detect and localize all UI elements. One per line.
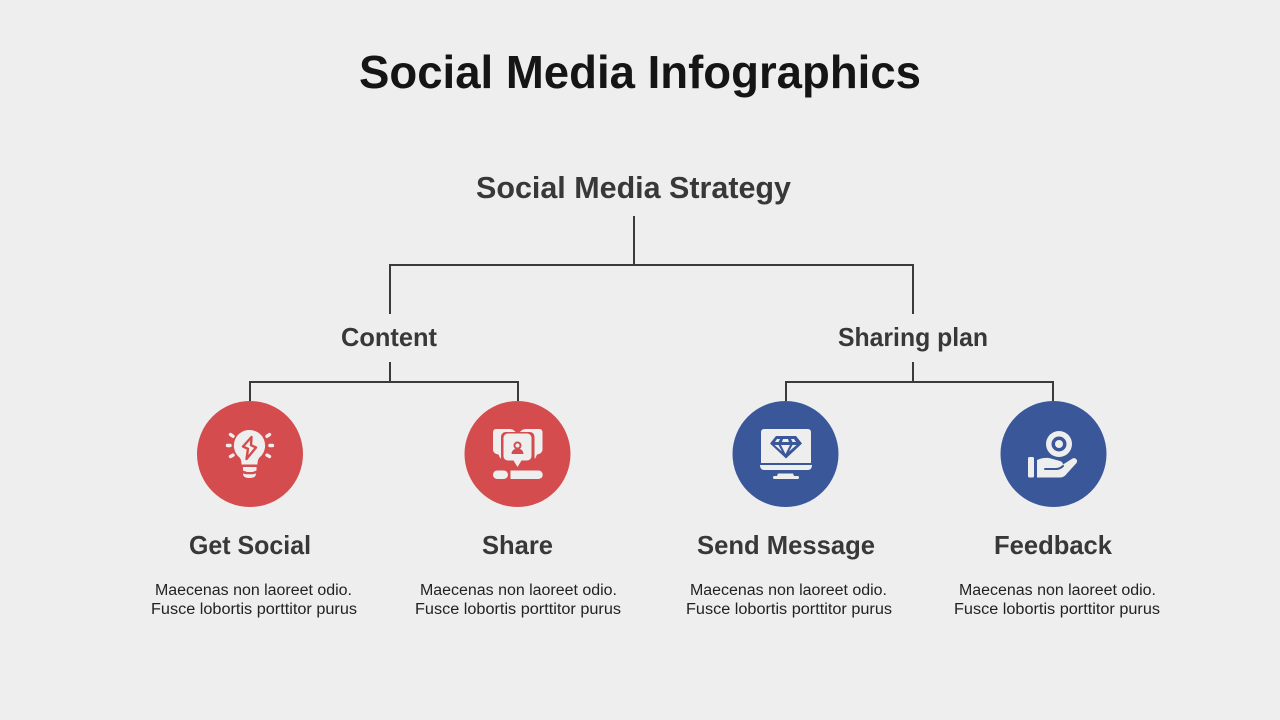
- icon: hand holding coin: [1000, 401, 1106, 507]
- label: Share: [482, 530, 553, 560]
- heading: content: Content: [341, 322, 437, 352]
- item: send message: [686, 401, 892, 618]
- heading: sharing plan: Sharing plan: [838, 322, 988, 352]
- item: feedback: [954, 401, 1160, 618]
- description: Maecenas non laoreet odio.: [420, 582, 617, 599]
- description: Fusce lobortis porttitor purus: [415, 601, 621, 618]
- label: Get Social: [189, 530, 311, 560]
- label: Send Message: [697, 530, 875, 560]
- heading: social media strategy: Social Media Strategy: [476, 170, 792, 205]
- description: Maecenas non laoreet odio.: [155, 582, 352, 599]
- description: Maecenas non laoreet odio.: [959, 582, 1156, 599]
- description: Fusce lobortis porttitor purus: [151, 601, 357, 618]
- icon: profile speech bubbles: [464, 401, 570, 507]
- title: Social Media Infographics: [359, 46, 921, 98]
- description: Fusce lobortis porttitor purus: [954, 601, 1160, 618]
- item: get social: [151, 401, 357, 618]
- tree connector: strategy to branches: [390, 216, 913, 314]
- tree connector: sharing plan to items: [786, 362, 1053, 401]
- description: Fusce lobortis porttitor purus: [686, 601, 892, 618]
- icon: monitor with diamond: [732, 401, 838, 507]
- item: share: [415, 401, 621, 618]
- icon: light bulb: [197, 401, 303, 507]
- label: Feedback: [994, 530, 1113, 560]
- tree connector: content to items: [250, 362, 518, 401]
- description: Maecenas non laoreet odio.: [690, 582, 887, 599]
